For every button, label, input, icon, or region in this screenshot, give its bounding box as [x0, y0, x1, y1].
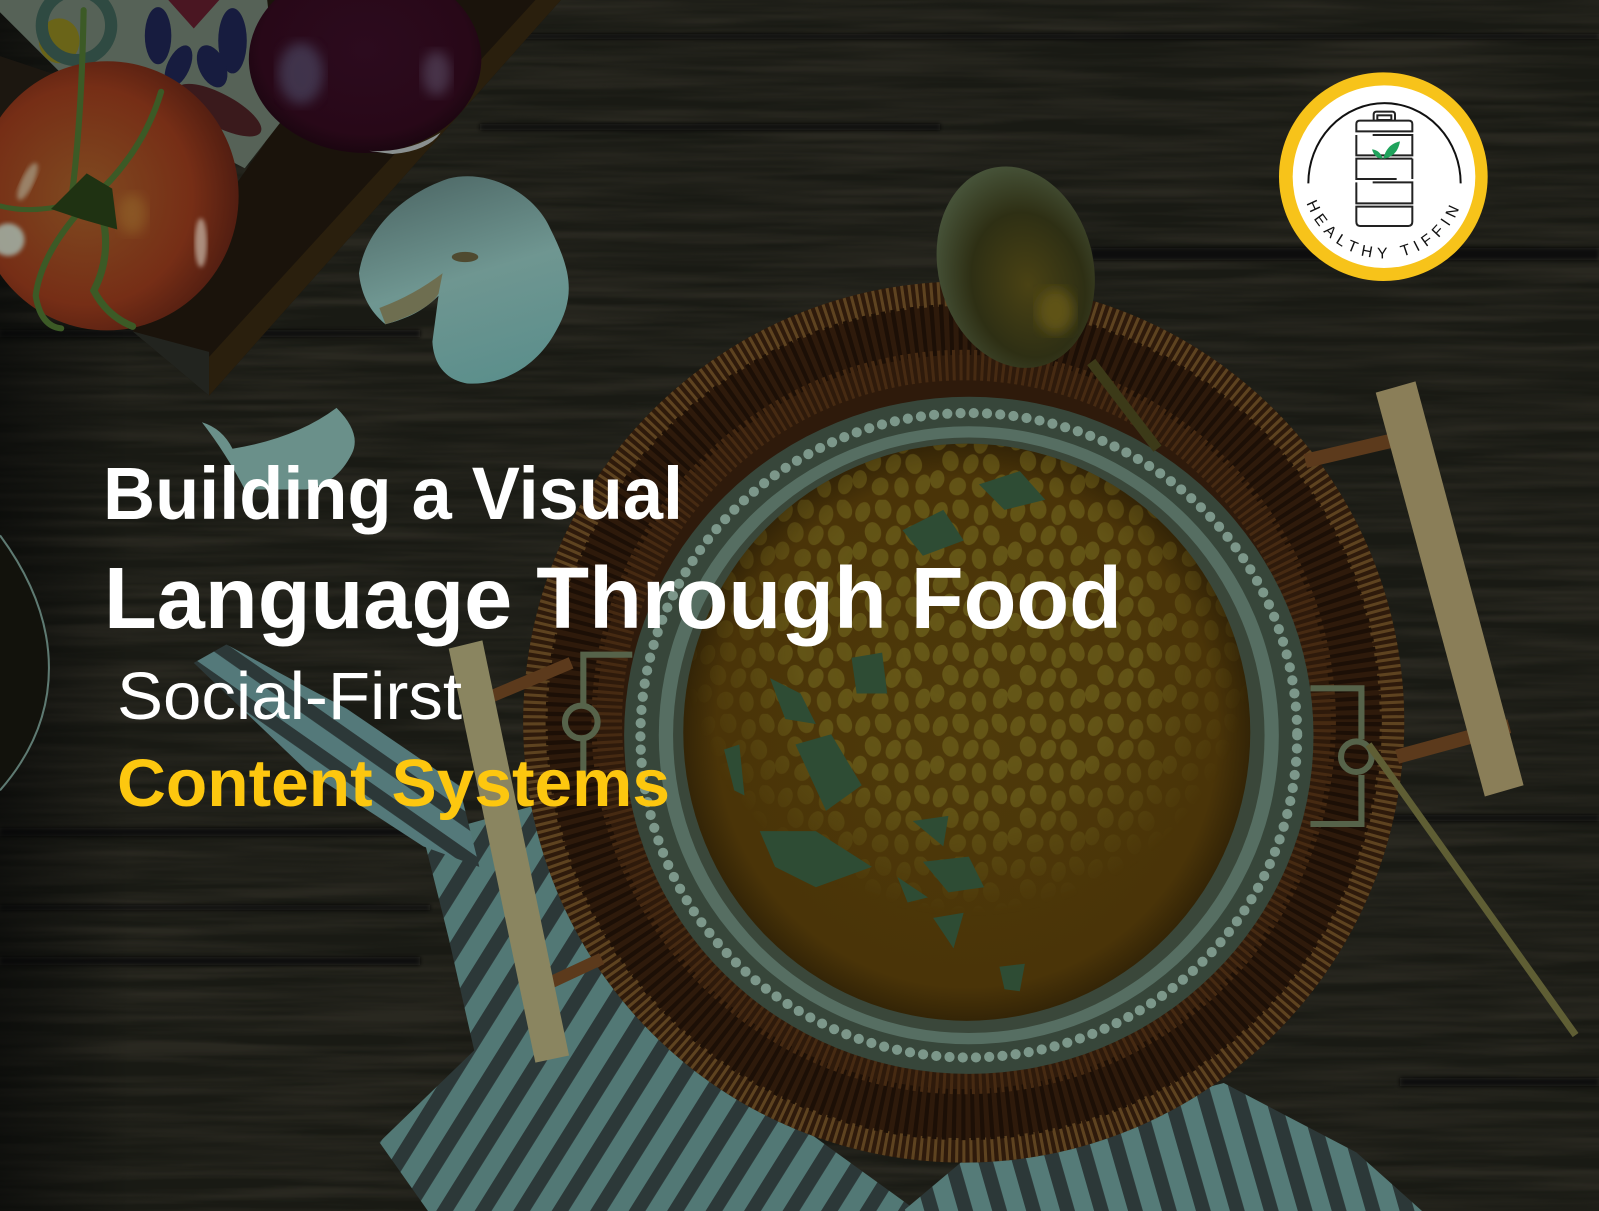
title: [103, 452, 1122, 821]
icon: green leaves: [1372, 141, 1400, 159]
spoon: [916, 149, 1157, 449]
right wooden handle: [1305, 381, 1524, 796]
subtitle line 1: Social-First: [117, 659, 462, 734]
herbs: [724, 471, 1045, 991]
garlic bulb: [359, 176, 569, 384]
title line 1: Building a Visual: [103, 452, 683, 535]
icon: tiffin box: [1356, 112, 1412, 226]
lentil soup: [683, 388, 1254, 1021]
title line 2: Language Through Food: [104, 550, 1122, 647]
logo: Healthy Tiffin badge: HEALTHY TIFFIN: [1306, 200, 1459, 258]
tomato stem: [0, 10, 161, 328]
subtitle line 2: Content Systems: [117, 746, 670, 821]
cutting board: [0, 0, 561, 396]
striped towel: [194, 645, 1423, 1211]
bowl side handles: [565, 655, 1372, 824]
red onion: [249, 0, 481, 154]
logo: Healthy Tiffin badge: [1279, 72, 1488, 281]
left wooden handle: [449, 640, 602, 1063]
bowl rim with beads: [624, 397, 1314, 1074]
wicker tray: [523, 281, 1404, 1163]
garlic clove: [202, 408, 355, 490]
tomato: [0, 10, 239, 330]
serving skewer: [1369, 744, 1576, 1035]
side bowl edge: [0, 535, 49, 790]
decorative tile: [0, 0, 280, 168]
